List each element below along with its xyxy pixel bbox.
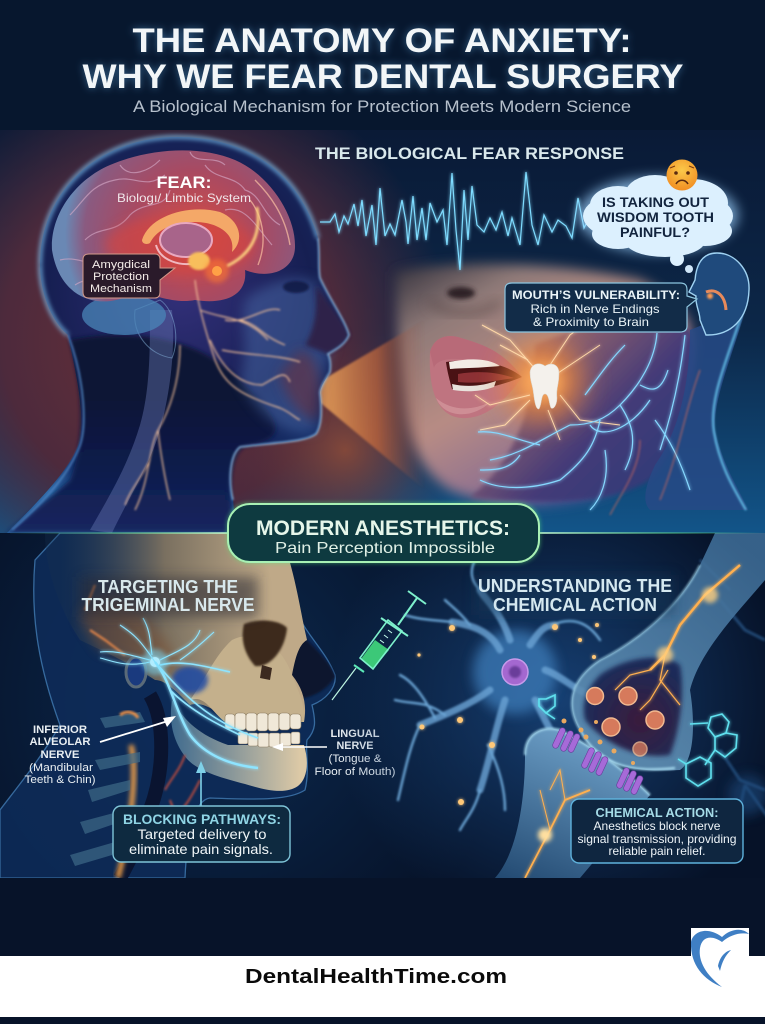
nose shadow: [447, 287, 475, 299]
title block: A Biological Mechanism for Protection Meets Modern Science: [133, 97, 631, 116]
title block: THE ANATOMY OF ANXIETY:: [132, 22, 632, 60]
banner: modern anesthetics: Pain Perception Impossible: [275, 540, 495, 557]
label: fear limbic system: Biologı/ Limbic System: [117, 191, 251, 205]
callout: blocking pathways: eliminate pain signals.: [129, 841, 273, 857]
label: lingual nerve: [314, 728, 396, 778]
arrow: blocking pathways: [196, 761, 206, 806]
title block: WHY WE FEAR DENTAL SURGERY: [82, 58, 684, 96]
label: inferior alveolar nerve: Teeth & Chin): [24, 774, 96, 786]
receptors: [552, 727, 644, 795]
heading: understanding chemical action: [475, 575, 675, 615]
callout: blocking pathways: [113, 806, 290, 862]
heading: targeting the trigeminal nerve: TRIGEMINAL NERVE: [82, 595, 254, 615]
arrow: inferior alveolar: [100, 716, 176, 742]
title block: [0, 0, 765, 130]
callout: mouth's vulnerability: MOUTH’S VULNERABILITY:: [512, 288, 680, 302]
thought text: IS TAKING OUT: [602, 194, 709, 210]
orange nerves near tooth: [475, 320, 620, 440]
callout: mouth's vulnerability: Rich in Nerve Endings: [530, 302, 660, 316]
heading: understanding chemical action: UNDERSTANDING THE: [478, 576, 672, 596]
callout: amygdala protection: Mechanism: [90, 283, 152, 295]
lips: [430, 336, 522, 418]
glowing dots: [417, 623, 599, 805]
label: fear limbic system: [118, 176, 250, 204]
illustration: neuron: [395, 560, 600, 830]
waveform: ECG: [320, 172, 606, 270]
cerebellum: [82, 295, 166, 335]
label: inferior alveolar nerve: (Mandibular: [29, 762, 93, 774]
illustration: woman's face with nerves: [395, 264, 748, 515]
label: lingual nerve: LINGUAL: [330, 728, 380, 740]
thought text: WISDOM TOOTH: [597, 209, 714, 225]
banner: modern anesthetics: [0, 503, 765, 563]
callout: mouth's vulnerability: & Proximity to Brain: [533, 315, 649, 329]
callout: chemical action: Anesthetics block nerve: [594, 819, 721, 833]
callout: blocking pathways: BLOCKING PATHWAYS:: [123, 811, 281, 827]
limbic system: [105, 215, 255, 275]
molecules: [539, 695, 737, 786]
footer band: [0, 956, 765, 1017]
arrow: lingual: [272, 743, 327, 751]
banner: modern anesthetics: MODERN ANESTHETICS:: [256, 517, 510, 540]
neurotransmitter dots: [562, 718, 635, 765]
label: inferior alveolar nerve: INFERIOR: [33, 724, 87, 736]
callout: amygdala protection: Protection: [93, 271, 149, 283]
label: lingual nerve: (Tongue &: [328, 753, 382, 765]
label: lingual nerve: Floor of Mouth): [314, 766, 396, 778]
panel: chemical action: [330, 533, 765, 878]
vesicles: [586, 687, 664, 756]
callout: mouth's vulnerability: [505, 283, 697, 332]
callout: amygdala protection: Amygdical: [92, 259, 150, 271]
brain: [52, 150, 295, 301]
illustration: presynaptic bulb: [572, 533, 765, 771]
illustration: transparent head profile: [7, 137, 349, 533]
icon: syringe: [332, 591, 426, 700]
heading: understanding chemical action: CHEMICAL ACTION: [493, 595, 657, 615]
label: fear limbic system: FEAR:: [156, 173, 212, 192]
callout: blocking pathways: Targeted delivery to: [138, 826, 267, 842]
amygdala: [188, 252, 210, 270]
illustration: postsynaptic terminal: [495, 729, 650, 878]
label: inferior alveolar nerve: ALVEOLAR: [30, 736, 91, 748]
icon: worried face emoji: [666, 160, 698, 190]
icon: wisdom tooth: [530, 364, 559, 409]
label: inferior alveolar nerve: NERVE: [40, 749, 80, 761]
panel: targeting the trigeminal nerve: [0, 533, 412, 878]
callout: amygdala protection: [83, 254, 175, 298]
panel: biological fear response: [0, 130, 765, 533]
callout: chemical action: [571, 799, 743, 863]
spinal column: [90, 310, 173, 533]
website name: DentalHealthTime.com: [245, 966, 507, 988]
brainstem and nerves: [125, 280, 300, 510]
tooth glow: [503, 342, 583, 422]
label: lingual nerve: NERVE: [336, 740, 374, 752]
illustration: skull: [45, 533, 307, 791]
teeth: [225, 713, 301, 747]
heading: biological fear response: THE BIOLOGICAL FEAR RESPONSE: [315, 144, 624, 163]
label: inferior alveolar nerve: [24, 724, 96, 786]
thought bubble: [578, 160, 738, 273]
illustration: orange beam from mouth: [320, 328, 419, 482]
callout: chemical action: CHEMICAL ACTION:: [596, 805, 718, 820]
nose shadow: [292, 639, 336, 699]
illustration: head outline and neck: [0, 533, 335, 878]
illustration: background neuron: [700, 560, 765, 830]
thought text: PAINFUL?: [620, 224, 690, 240]
heading: targeting the trigeminal nerve: [80, 577, 258, 617]
illustration: cervical spine: [70, 695, 200, 878]
blue nerves: [478, 333, 690, 510]
callout: chemical action: reliable pain relief.: [608, 844, 706, 858]
callout: chemical action: signal transmission, providing: [578, 832, 736, 846]
illustration: trigeminal nerve branches: [100, 618, 258, 768]
electric signal: [615, 565, 740, 710]
logo: tooth: [691, 928, 749, 987]
icon: small head with mouth: [689, 253, 749, 335]
heading: targeting the trigeminal nerve: TARGETING THE: [98, 577, 238, 597]
